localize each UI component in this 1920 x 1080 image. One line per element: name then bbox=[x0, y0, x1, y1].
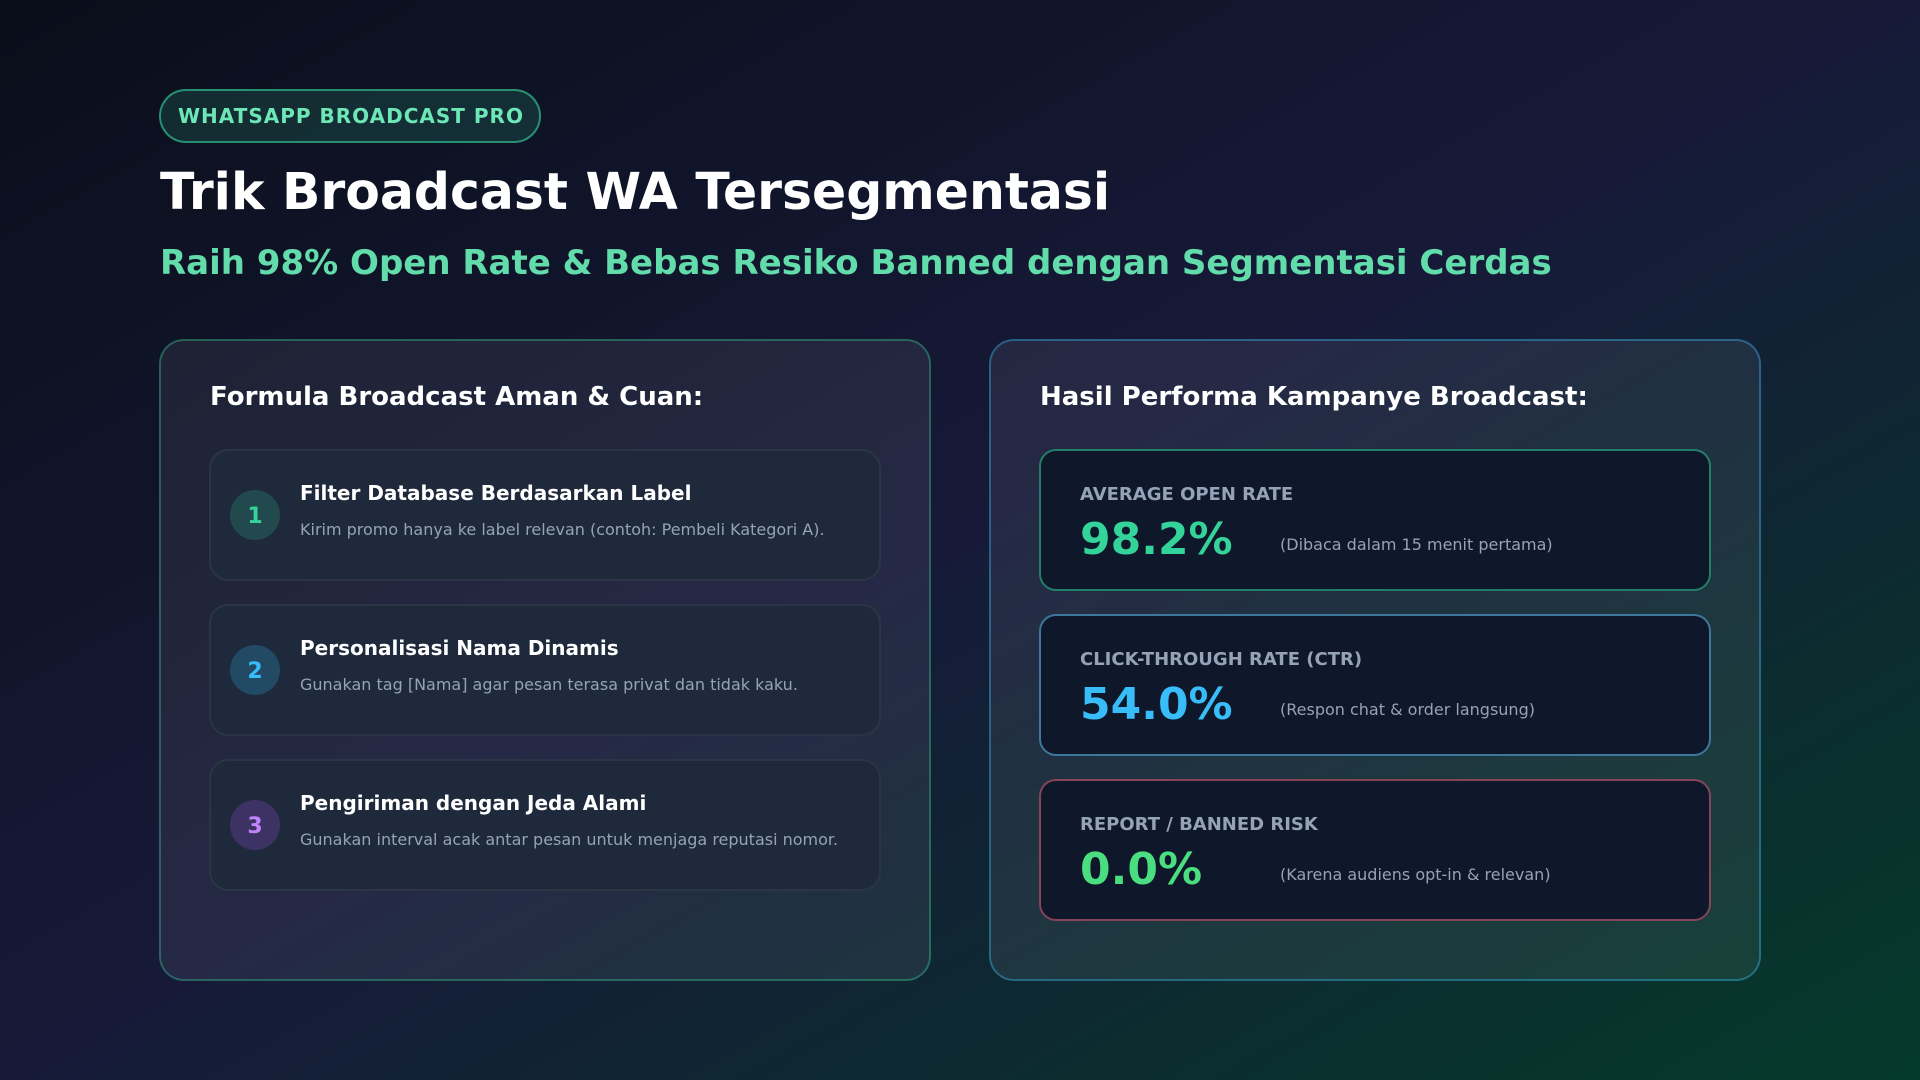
banned risk value: 0.0% bbox=[1080, 844, 1202, 895]
step 1 title: Filter Database Berdasarkan Label bbox=[300, 481, 691, 505]
badge: WhatsApp Broadcast Pro bbox=[159, 89, 541, 143]
step 2 number bbox=[230, 645, 280, 695]
open rate note: (Dibaca dalam 15 menit pertama) bbox=[1280, 535, 1553, 554]
metric card: open rate bbox=[1039, 449, 1711, 591]
open rate label: AVERAGE OPEN RATE bbox=[1080, 484, 1293, 505]
banned risk note: (Karena audiens opt-in & relevan) bbox=[1280, 865, 1551, 884]
step card 2 bbox=[209, 604, 881, 736]
panel: formula bbox=[159, 339, 931, 981]
step 3 number bbox=[230, 800, 280, 850]
panel heading: formula: Formula Broadcast Aman & Cuan: bbox=[210, 382, 703, 412]
panel heading: performance: Hasil Performa Kampanye Broadcast: bbox=[1040, 382, 1588, 412]
CTR label: CLICK-THROUGH RATE (CTR) bbox=[1080, 649, 1362, 670]
metric card: banned risk bbox=[1039, 779, 1711, 921]
step 3 number: 3 bbox=[247, 814, 263, 839]
subtitle: Raih 98% Open Rate & Bebas Resiko Banned dengan Segmentasi Cerdas bbox=[160, 243, 1552, 283]
step 1 number: 1 bbox=[247, 504, 263, 529]
CTR value: 54.0% bbox=[1080, 679, 1233, 730]
title: Trik Broadcast WA Tersegmentasi bbox=[160, 162, 1110, 221]
step card 3 bbox=[209, 759, 881, 891]
step 1 number bbox=[230, 490, 280, 540]
badge: WhatsApp Broadcast Pro: WHATSAPP BROADCAST PRO bbox=[178, 104, 524, 128]
metric card: CTR bbox=[1039, 614, 1711, 756]
CTR note: (Respon chat & order langsung) bbox=[1280, 700, 1535, 719]
banned risk label: REPORT / BANNED RISK bbox=[1080, 814, 1318, 835]
step 1 description: Kirim promo hanya ke label relevan (contoh: Pembeli Kategori A). bbox=[300, 520, 825, 539]
step 2 number: 2 bbox=[247, 659, 263, 684]
panel: performance bbox=[989, 339, 1761, 981]
step 3 title: Pengiriman dengan Jeda Alami bbox=[300, 791, 646, 815]
step card 1 bbox=[209, 449, 881, 581]
step 2 title: Personalisasi Nama Dinamis bbox=[300, 636, 619, 660]
open rate value: 98.2% bbox=[1080, 514, 1233, 565]
step 2 description: Gunakan tag [Nama] agar pesan terasa privat dan tidak kaku. bbox=[300, 675, 798, 694]
step 3 description: Gunakan interval acak antar pesan untuk menjaga reputasi nomor. bbox=[300, 830, 838, 849]
